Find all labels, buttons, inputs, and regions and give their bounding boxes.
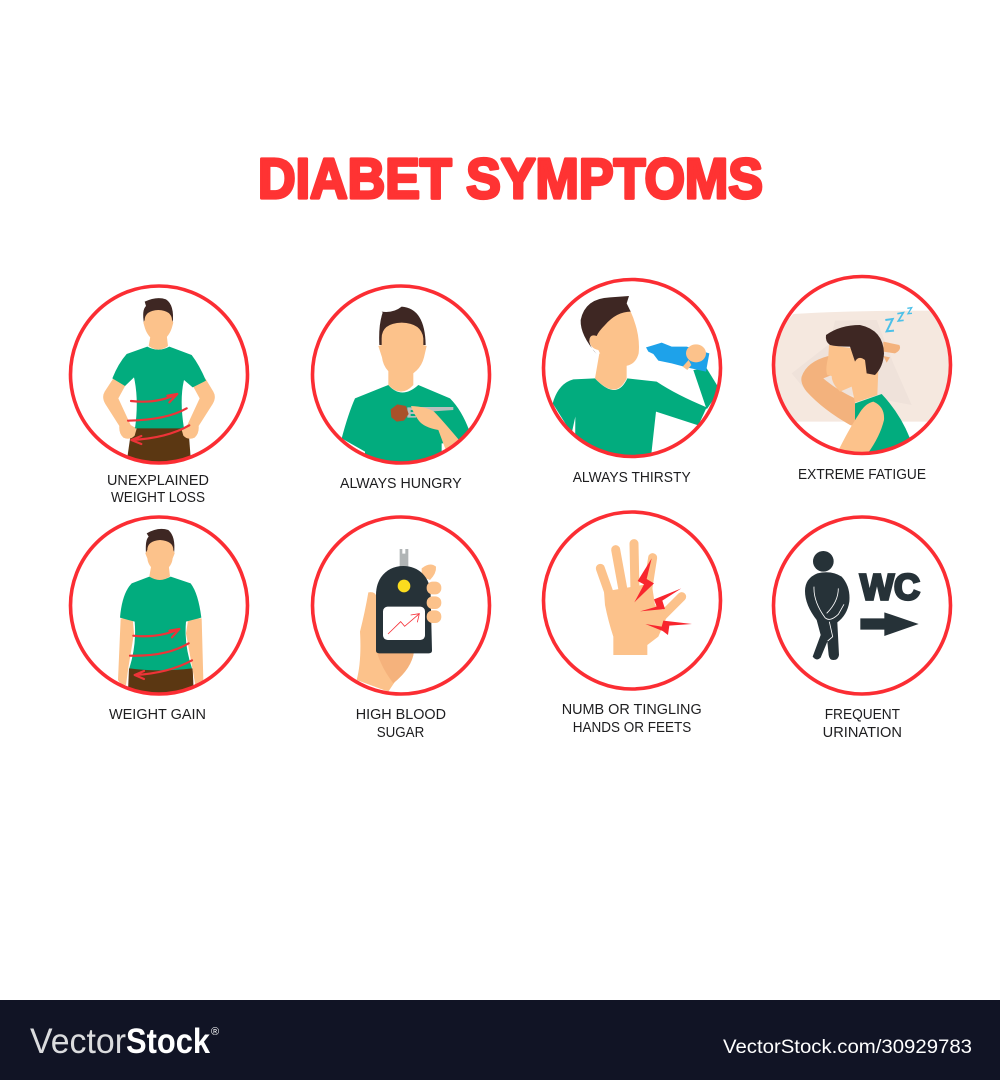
ring (544, 280, 720, 456)
ring (70, 517, 248, 694)
ring (544, 512, 720, 689)
label: ALWAYS HUNGRY (340, 476, 462, 492)
label (107, 473, 209, 506)
footer logo: Vector (30, 1022, 126, 1061)
label: FREQUENT (825, 707, 900, 723)
icon: man with fork (342, 307, 469, 470)
label: HIGH BLOOD (356, 707, 446, 723)
title: DIABET SYMPTOMS (258, 147, 763, 211)
icon: heavier man with arrows (118, 529, 203, 698)
footer logo: Stock (126, 1022, 210, 1061)
ring (774, 276, 950, 454)
icon: hand with lightning bolts (600, 544, 692, 655)
footer logo: ® (211, 1026, 219, 1038)
label (562, 702, 702, 736)
icon: slim man with arrows (103, 298, 215, 467)
ring (312, 517, 490, 694)
label: WEIGHT GAIN (109, 707, 206, 723)
icon: man drinking from bottle (553, 296, 720, 460)
label: NUMB OR TINGLING (562, 702, 702, 718)
icon: person needing toilet with WC sign: WC (860, 567, 920, 608)
ring (312, 286, 490, 463)
label (823, 707, 902, 741)
panel: weight gain (70, 517, 248, 723)
footer logo (30, 1022, 219, 1061)
panel: always thirsty (544, 280, 720, 486)
panel: frequent urination (774, 517, 950, 741)
label: URINATION (823, 725, 902, 741)
ring (70, 286, 248, 463)
panel: unexplained weight loss (70, 286, 248, 506)
panel: always hungry (312, 286, 490, 492)
panel: numb or tingling (544, 512, 720, 736)
icon: sleeping man on pillow (773, 308, 953, 454)
panel: high blood sugar (312, 517, 490, 741)
icon: hand holding glucose meter (357, 549, 441, 692)
label: UNEXPLAINED (107, 473, 209, 489)
label: SUGAR (377, 725, 424, 741)
panel: extreme fatigue (773, 276, 953, 483)
label: WEIGHT LOSS (111, 490, 205, 506)
label (356, 707, 446, 741)
ring (774, 517, 950, 694)
footer image id: VectorStock.com/30929783 (723, 1037, 972, 1058)
label: HANDS OR FEETS (573, 720, 691, 736)
label: ALWAYS THIRSTY (573, 470, 691, 486)
footer band (0, 1000, 1000, 1080)
icon: person needing toilet with WC sign (805, 551, 920, 660)
label: EXTREME FATIGUE (798, 467, 926, 483)
